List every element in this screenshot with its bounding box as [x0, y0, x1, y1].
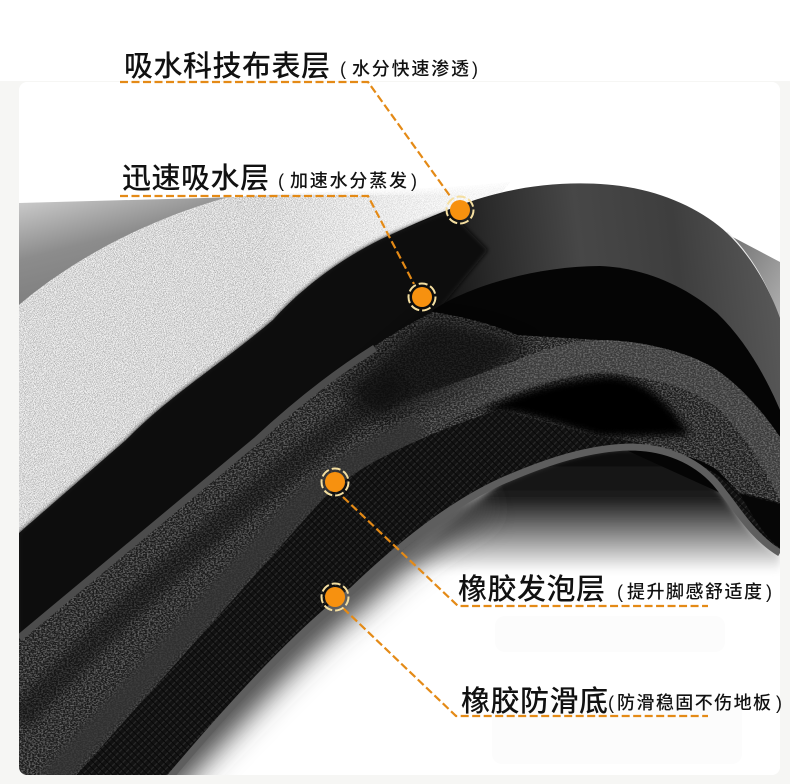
leader line 3 [343, 497, 708, 606]
foam dark streak [19, 380, 400, 720]
callout: anti-slip rubber base [322, 584, 782, 718]
marker 3 [322, 468, 348, 496]
heading 4: 橡胶防滑底 [461, 685, 608, 718]
inner gap [420, 266, 780, 520]
note 4: ) [776, 693, 782, 713]
note 4: ( [608, 693, 614, 713]
rubber foam layer [19, 312, 780, 775]
lighter foam band [380, 340, 780, 500]
heading 3: 橡胶发泡层 [458, 573, 605, 606]
marker 2 [408, 284, 436, 310]
leader line 1 [120, 82, 450, 196]
leader line 4 [343, 608, 708, 716]
fast absorb layer: black sheet with grey top [19, 183, 780, 645]
dark foam top near the gap [340, 318, 530, 420]
foam lighter streak [50, 428, 420, 782]
callout: surface fabric layer [120, 50, 478, 224]
note 2: ) [411, 171, 417, 191]
black wedge at right [740, 494, 780, 548]
heading 1: 吸水科技布表层 [124, 50, 330, 83]
marker 4 [322, 584, 348, 610]
note 1: ( [340, 59, 346, 79]
note 4: 防滑稳固不伤地板 [617, 693, 771, 713]
thin grey stripe under black sheet [19, 348, 375, 638]
note 1: 水分快速渗透 [352, 59, 469, 79]
leader line 2 [120, 196, 414, 284]
back of mat, right [727, 232, 780, 318]
note 2: ( [278, 171, 284, 191]
callout: fast absorb layer [120, 162, 436, 310]
surface fabric layer [19, 176, 515, 533]
shadow under mat [150, 445, 780, 784]
marker 1 [446, 196, 474, 224]
note 1: ) [472, 59, 478, 79]
anti-slip rubber base mesh [70, 410, 780, 782]
heading 2: 迅速吸水层 [122, 162, 269, 195]
back of mat, left [19, 197, 240, 310]
callout: rubber foam layer [322, 468, 772, 606]
faint light patches under the arch [492, 616, 742, 764]
note 3: ( [617, 582, 623, 602]
bottom grey edge [166, 447, 780, 782]
note 2: 加速水分蒸发 [290, 171, 407, 191]
note 3: 提升脚感舒适度 [627, 582, 762, 602]
black patch in foam [480, 376, 690, 437]
note 3: ) [766, 582, 772, 602]
black underside of top layer [19, 209, 488, 533]
